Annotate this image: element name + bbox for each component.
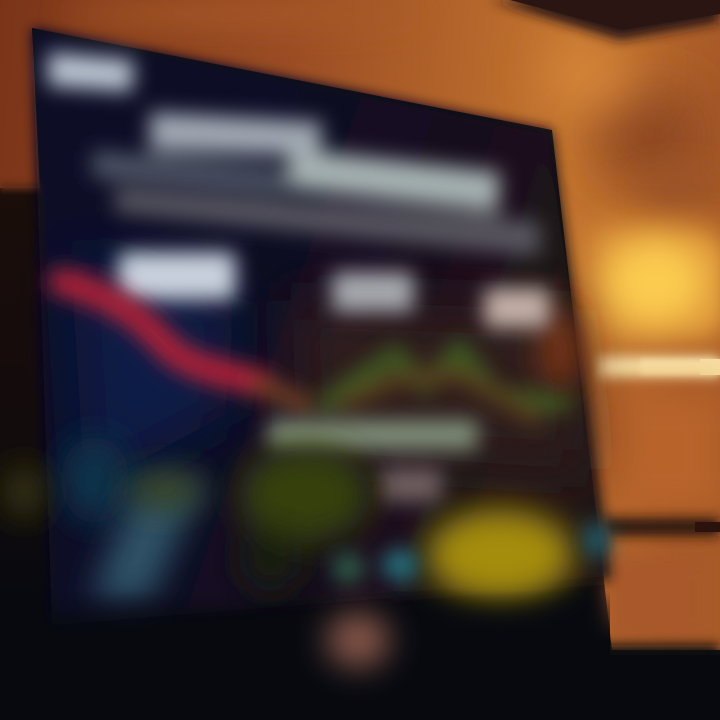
lamp glow <box>592 226 720 342</box>
teal spots <box>332 522 611 584</box>
lamp light strip <box>598 356 720 378</box>
blurred stat labels <box>118 252 550 328</box>
pink foreground blur <box>326 612 390 668</box>
red line chart <box>62 282 305 405</box>
blue left panel <box>61 436 205 600</box>
green and orange line chart <box>320 350 570 420</box>
dark ceiling corner <box>490 0 720 40</box>
lower wall, right <box>600 394 720 720</box>
board <box>32 28 612 625</box>
green plant blur <box>238 447 371 594</box>
foreground dark floor <box>0 590 610 720</box>
lower caption bars <box>268 420 478 502</box>
yellow blob <box>426 509 574 601</box>
olive blur, left <box>4 466 44 518</box>
blurred heading bars <box>48 52 540 256</box>
